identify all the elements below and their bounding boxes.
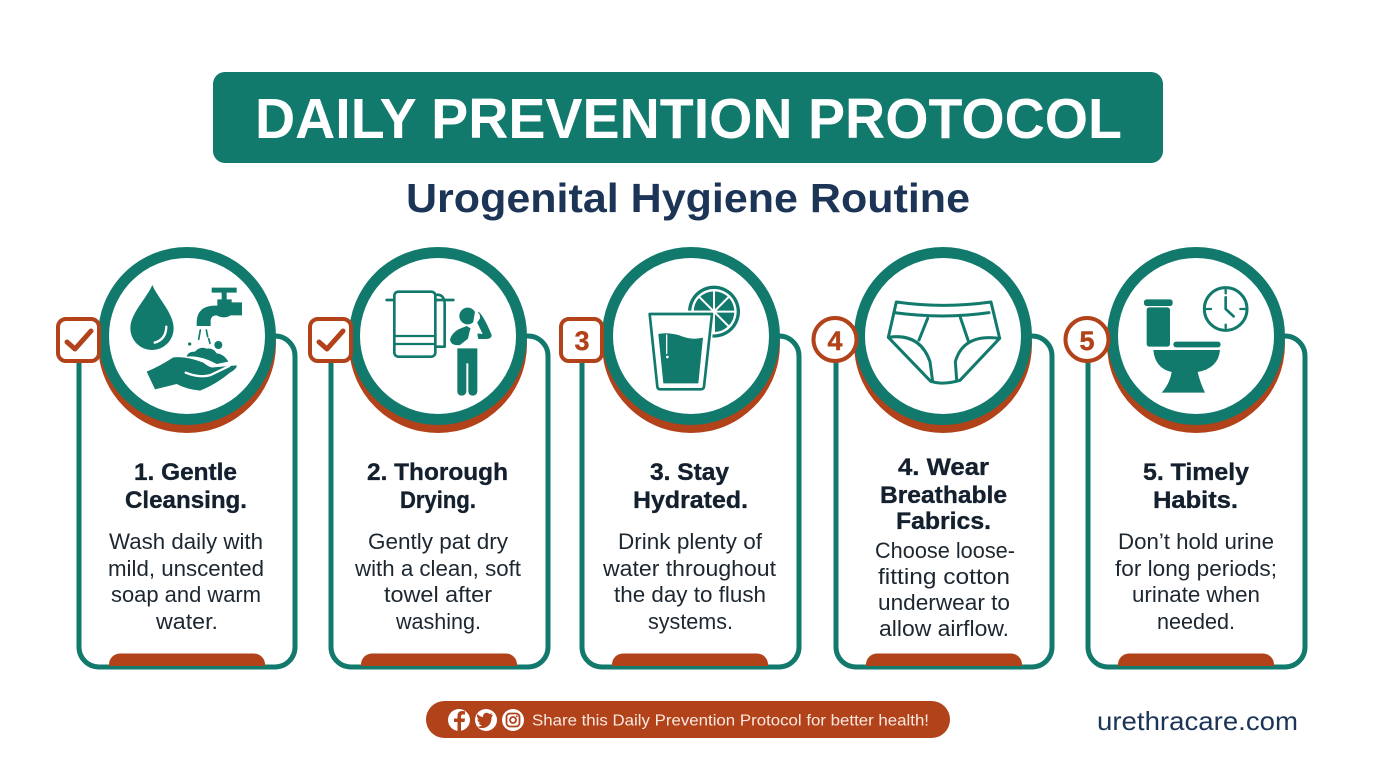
- body text: water throughout: [602, 556, 776, 581]
- badge: number 4: 4: [827, 326, 843, 356]
- badge: number 4: [814, 318, 856, 361]
- panel: step 4 wear breathable fabrics: [814, 252, 1052, 667]
- body text: [1115, 529, 1277, 634]
- body text: Don’t hold urine: [1118, 529, 1274, 554]
- badge: number 5: [1066, 318, 1108, 361]
- badge: number 3: 3: [574, 326, 590, 356]
- heading: 4. Wear: [898, 454, 989, 481]
- body text: Gently pat dry: [368, 529, 508, 554]
- subtitle: Urogenital Hygiene Routine: [406, 175, 970, 221]
- panel: step 3 stay hydrated: [561, 252, 799, 667]
- badge: number 3: [561, 319, 602, 361]
- panel: step 5 timely habits: [1066, 252, 1305, 667]
- body text: [875, 538, 1015, 641]
- heading: Breathable: [880, 482, 1007, 509]
- icon: facebook: [448, 709, 470, 731]
- badge: check mark: [310, 319, 351, 361]
- body text: water.: [155, 609, 218, 634]
- body text: [108, 529, 264, 634]
- heading: Hydrated.: [633, 487, 748, 514]
- icon: towel on rail and person drying: [387, 292, 492, 396]
- body text: allow airflow.: [879, 616, 1009, 641]
- share message: Share this Daily Prevention Protocol for better health!: [532, 712, 929, 730]
- heading: 2. Thorough: [367, 459, 508, 486]
- heading: [633, 459, 748, 514]
- heading: Fabrics.: [896, 508, 991, 535]
- body text: Wash daily with: [109, 529, 263, 554]
- body text: systems.: [648, 609, 733, 634]
- icon: cotton underwear: [888, 302, 1000, 383]
- body text: underwear to: [878, 590, 1010, 615]
- body text: [354, 529, 521, 634]
- heading: [367, 459, 508, 514]
- panel: step 2 thorough drying: [310, 252, 548, 667]
- heading: [880, 454, 1007, 535]
- icon: glass of water with citrus slice: [648, 286, 740, 393]
- body text: Choose loose-: [875, 538, 1015, 563]
- badge: number 5: 5: [1079, 326, 1095, 356]
- body text: washing.: [395, 609, 481, 634]
- heading: Habits.: [1153, 487, 1238, 514]
- title banner: DAILY PREVENTION PROTOCOL: [255, 87, 1122, 151]
- badge: check mark: [58, 319, 99, 361]
- icon: instagram: [502, 709, 524, 731]
- body text: soap and warm: [111, 582, 261, 607]
- icon: toilet and clock: [1144, 288, 1247, 393]
- icon: twitter: [475, 709, 497, 731]
- heading: Cleansing.: [125, 487, 247, 514]
- body text: for long periods;: [1115, 556, 1277, 581]
- heading: [125, 459, 247, 514]
- panel: step 1 gentle cleansing: [58, 252, 295, 667]
- body text: with a clean, soft: [354, 556, 521, 581]
- body text: towel after: [384, 582, 492, 607]
- heading: [1143, 459, 1250, 514]
- body text: Drink plenty of: [618, 529, 763, 554]
- icon: water drop, faucet and washing hand: [130, 285, 242, 391]
- heading: Drying.: [400, 487, 476, 514]
- body text: mild, unscented: [108, 556, 264, 581]
- body text: the day to flush: [614, 582, 766, 607]
- website url: urethracare.com: [1097, 706, 1298, 736]
- title banner: [213, 72, 1163, 163]
- share bar: [426, 701, 950, 738]
- body text: urinate when: [1132, 582, 1260, 607]
- body text: fitting cotton: [878, 564, 1010, 589]
- heading: 5. Timely: [1143, 459, 1250, 486]
- body text: needed.: [1157, 609, 1235, 634]
- heading: 3. Stay: [650, 459, 730, 486]
- body text: [602, 529, 776, 634]
- heading: 1. Gentle: [134, 459, 237, 486]
